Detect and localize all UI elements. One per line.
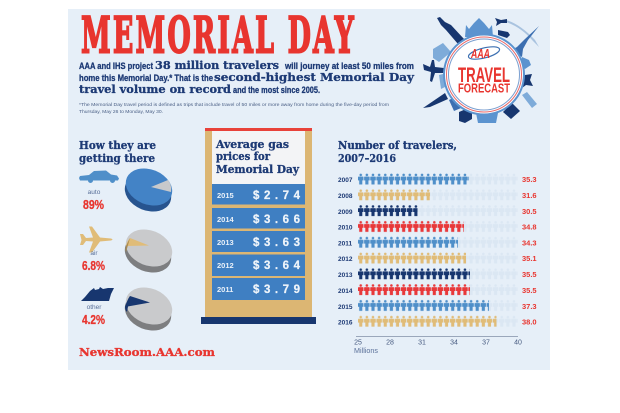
row 2015: $ 2 . 7 4 xyxy=(253,190,301,202)
heading: How they are xyxy=(79,138,156,152)
row 2014 xyxy=(212,208,305,228)
panel: number of travelers xyxy=(338,138,537,355)
icon: plane xyxy=(80,226,112,252)
logo: AAA travel forecast xyxy=(423,17,539,123)
badge rings xyxy=(444,34,524,114)
x axis xyxy=(354,336,522,355)
row 2015 xyxy=(358,299,489,311)
intro text: home this Memorial Day.* That is the xyxy=(79,73,213,84)
heading: Memorial Day xyxy=(216,163,300,176)
row 2013 xyxy=(212,231,305,252)
x axis: Millions xyxy=(354,346,378,355)
row 2013: 2013 xyxy=(217,238,234,247)
label: auto: auto xyxy=(88,189,101,196)
icon: ship xyxy=(81,287,114,301)
label: other xyxy=(82,304,105,327)
label: auto: 89% xyxy=(83,197,104,212)
heading xyxy=(215,138,300,176)
heading xyxy=(79,138,156,165)
year labels: 2007 xyxy=(338,177,353,184)
year labels: 2016 xyxy=(338,320,353,326)
year labels: 2011 xyxy=(338,240,352,248)
label: other: 4.2% xyxy=(82,312,105,327)
row 2011 xyxy=(358,236,458,248)
value labels xyxy=(522,175,537,326)
label: air: air xyxy=(90,250,98,257)
row 2010 xyxy=(358,220,464,232)
intro text: travel volume on record xyxy=(79,82,231,96)
value labels: 35.3 xyxy=(522,175,537,184)
intro text: AAA and IHS project xyxy=(79,61,154,72)
x axis: 40 xyxy=(514,340,522,346)
row 2011 xyxy=(212,278,305,300)
row 2014: $ 3 . 6 6 xyxy=(253,214,300,226)
intro text: will journey at least 50 miles from xyxy=(284,61,414,72)
row 2009 xyxy=(358,205,418,217)
row 2013: $ 3 . 6 3 xyxy=(253,237,300,249)
intro text: and the most since 2005. xyxy=(233,85,320,96)
value labels: 35.5 xyxy=(522,270,537,279)
label: air: 6.8% xyxy=(82,258,105,273)
footnote xyxy=(79,102,389,115)
year labels: 2012 xyxy=(338,256,353,263)
panel: how they are getting there xyxy=(79,138,215,359)
icon: landmarks around globe xyxy=(423,17,539,123)
year labels: 2010 xyxy=(338,224,353,232)
intro text xyxy=(79,58,414,96)
intro text: second-highest Memorial Day xyxy=(214,70,414,84)
logo text: TRAVEL xyxy=(458,64,510,87)
pie: air xyxy=(119,223,178,279)
background panel xyxy=(68,9,550,370)
row 2012: 2012 xyxy=(217,261,234,270)
AAA oval: AAA xyxy=(470,46,490,61)
pictogram chart xyxy=(358,173,518,327)
row 2014 xyxy=(358,284,470,296)
value labels: 35.1 xyxy=(522,254,537,263)
heading: Average gas xyxy=(215,138,289,151)
x axis: 34 xyxy=(450,340,458,346)
heading xyxy=(338,138,457,165)
value labels: 37.3 xyxy=(522,302,537,311)
value labels: 38.0 xyxy=(522,318,537,326)
heading: Number of travelers, xyxy=(338,138,457,152)
row 2016 xyxy=(358,315,496,327)
label: auto xyxy=(83,189,104,212)
row 2013 xyxy=(358,268,470,280)
x axis: 28 xyxy=(386,340,394,346)
title: MEMORIAL DAY xyxy=(81,6,356,64)
row 2008 xyxy=(358,189,430,201)
value labels: 34.8 xyxy=(522,222,537,232)
year labels: 2014 xyxy=(338,288,353,295)
label: air xyxy=(82,250,105,273)
row 2015: 2015 xyxy=(217,191,234,200)
year labels: 2008 xyxy=(338,193,353,200)
row 2015 xyxy=(212,184,305,204)
year labels: 2013 xyxy=(338,272,353,279)
pie: other xyxy=(119,281,178,337)
value labels: 34.3 xyxy=(522,238,537,248)
logo: AAA travel forecast: FORECAST xyxy=(458,82,510,96)
pie: auto xyxy=(119,162,178,218)
year labels: 2009 xyxy=(338,209,353,216)
value labels: 35.5 xyxy=(522,286,537,295)
year labels: 2015 xyxy=(338,304,353,311)
heading: 2007–2016 xyxy=(338,151,396,165)
year labels xyxy=(338,177,353,326)
row 2014: 2014 xyxy=(217,215,235,224)
row 2012 xyxy=(212,254,305,276)
x axis: 25 xyxy=(354,340,362,346)
row 2012: $ 3 . 6 4 xyxy=(253,260,301,272)
value labels: 31.6 xyxy=(522,191,537,200)
heading: prices for xyxy=(216,150,270,163)
sign board xyxy=(205,129,312,317)
footnote: Thursday, May 26 to Monday, May 30. xyxy=(79,109,163,115)
row 2011: $ 3 . 7 9 xyxy=(253,284,300,296)
value labels: 30.5 xyxy=(522,207,537,216)
label: other: other xyxy=(87,304,102,311)
row 2011: 2011 xyxy=(217,285,233,294)
row 2012 xyxy=(358,252,466,264)
heading: getting there xyxy=(79,151,155,165)
icon: car xyxy=(79,170,119,183)
row 2007 xyxy=(358,173,469,185)
unfilled people xyxy=(358,173,518,327)
x axis: 31 xyxy=(418,340,426,346)
panel: average gas prices xyxy=(201,128,316,324)
x axis: 37 xyxy=(482,340,490,346)
footnote: *The Memorial Day travel period is defined as trips that include travel of 50 miles or more away from home during the five-day period from xyxy=(79,102,389,108)
website link: NewsRoom.AAA.com xyxy=(79,345,215,359)
intro text: 38 million travelers xyxy=(155,58,279,72)
